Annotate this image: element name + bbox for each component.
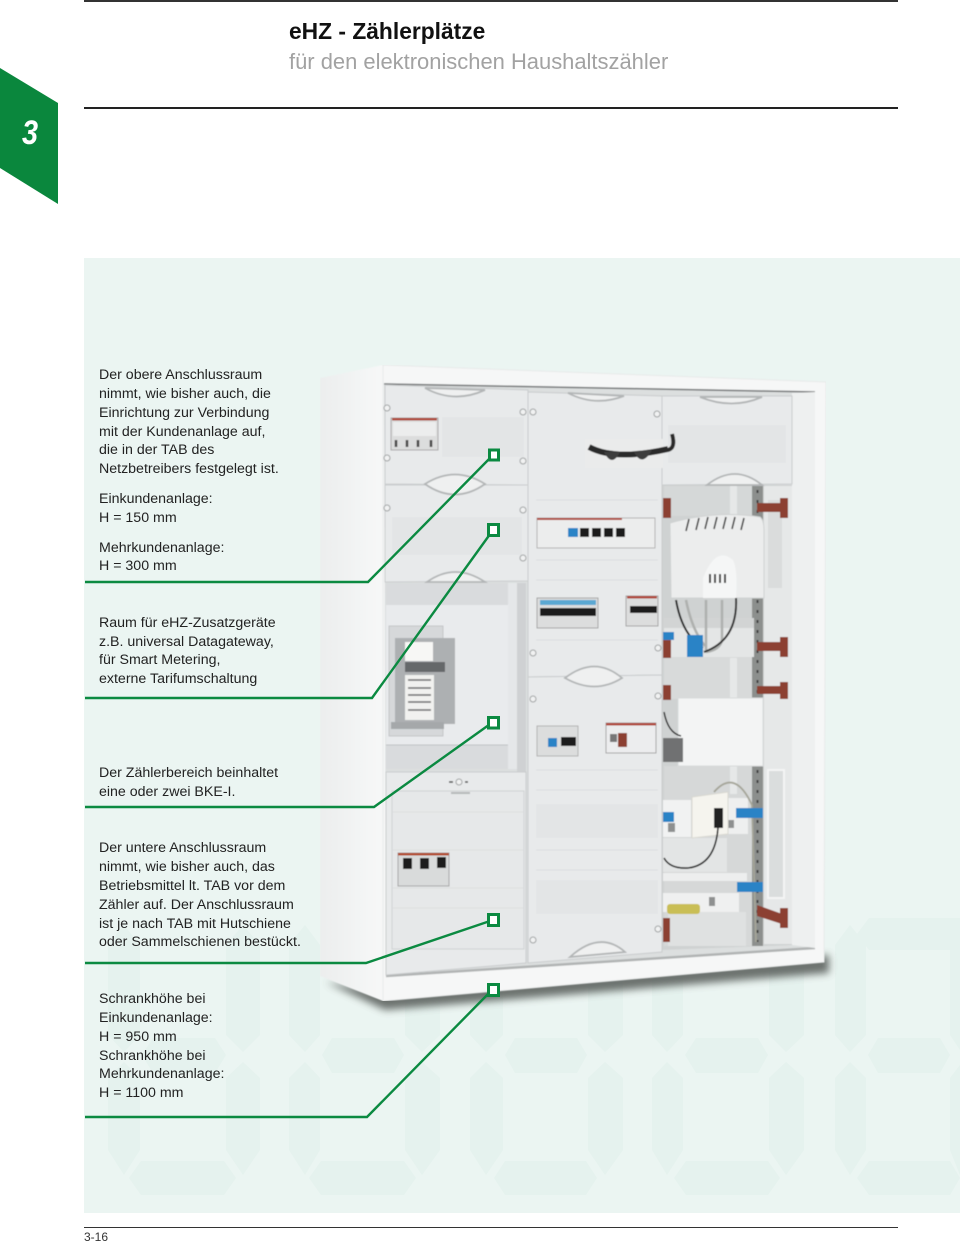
yellow terminal [667,904,700,914]
right light column [764,486,792,944]
handles [425,388,485,397]
cabinet interior [384,383,815,976]
callout text: upper connection room: nimmt, wie bisher auch, die [99,386,271,402]
callout text: upper connection room: die in der TAB des [99,442,214,458]
column 2 panels [528,392,792,963]
lower breaker [398,853,449,886]
callout text: meter area: eine oder zwei BKE-I. [99,784,235,800]
breaker row two [537,596,658,628]
leader line 2 [85,524,498,698]
callout text: cabinet height: H = 950 mm [99,1029,177,1045]
callout text: lower connection room: oder Sammelschienen bestückt. [99,934,301,950]
callout text: upper connection room: H = 300 mm [99,558,177,574]
handles [568,393,624,401]
latch [449,779,470,793]
callout text: auxiliary devices: Raum für eHZ-Zusatzgeräte [99,615,276,631]
callout text: meter area: Der Zählerbereich beinhaltet [99,765,278,781]
cabinet photo [320,365,826,1001]
callout text: lower connection room: Zähler auf. Der Anschlussraum [99,897,294,913]
breaker row three [537,723,656,756]
callout text: upper connection room: H = 150 mm [99,510,177,526]
surge arrester [391,418,438,450]
leader line 3 [85,718,498,807]
data gateway [663,515,764,657]
callout text: upper connection room: mit der Kundenanlage auf, [99,424,265,440]
vent lines [392,812,524,908]
top rule [84,0,898,2]
breaker row one [537,518,655,548]
mounting rail [752,486,763,946]
callout text: lower connection room: ist je nach TAB mit Hutschiene [99,916,291,932]
red brackets [663,498,788,942]
callout text: upper connection room: Der obere Anschlussraum [99,367,262,383]
chapter tab [0,68,58,204]
perforated strips [730,486,737,516]
callout text: lower connection room: Der untere Anschlussraum [99,840,266,856]
din rail middle [663,800,691,837]
wall socket with cable [664,783,756,942]
background digit pattern [108,918,960,1195]
callout text: upper connection room: Mehrkundenanlage: [99,540,224,556]
screws [384,405,390,411]
chapter tab: 3 [22,113,38,152]
column 1 panels [384,385,528,975]
right inner wall [792,392,815,948]
cabinet front frame [383,365,826,1001]
cable clamp [585,434,673,468]
callout text: upper connection room: Einrichtung zur Verbindung [99,405,269,421]
callout text: lower connection room: Betriebsmittel lt. TAB vor dem [99,878,285,894]
callout text: auxiliary devices: z.B. universal Datagateway, [99,634,274,650]
vent strips [442,417,524,457]
cabinet side wall [320,365,383,1001]
column 3 top panel [662,396,792,485]
callout text: auxiliary devices: externe Tarifumschaltung [99,671,257,687]
leader line 5 [85,984,498,1117]
meter [389,626,455,736]
callout text: upper connection room: Einkundenanlage: [99,491,213,507]
second device box [663,698,763,766]
din rail lower [663,873,747,881]
blue clamps [663,808,763,892]
panel: pale green background [84,258,960,1213]
din rail upper [664,618,754,628]
callout text: cabinet height: Schrankhöhe bei [99,991,205,1007]
cabinet shadow [326,955,829,1010]
callout text: upper connection room: Netzbetreibers festgelegt ist. [99,461,279,477]
callout text: lower connection room: nimmt, wie bisher auch, das [99,859,275,875]
screws [530,409,536,415]
meter recess [386,583,526,773]
footer rule [84,1227,898,1228]
leader line 1 [85,450,498,582]
title: eHZ - Zählerplätze [289,18,485,44]
lower panel [386,772,526,975]
callout text: auxiliary devices: für Smart Metering, [99,652,220,668]
callout text: cabinet height: Einkundenanlage: [99,1010,213,1026]
upper wall [664,486,752,516]
leader line 4 [85,914,498,963]
subtitle: für den elektronischen Haushaltszähler [289,49,668,74]
label sheet [663,838,727,872]
vent strips [536,804,658,838]
callout text: cabinet height: Schrankhöhe bei [99,1048,205,1064]
callout text: cabinet height: H = 1100 mm [99,1085,184,1101]
callout text: cabinet height: Mehrkundenanlage: [99,1066,224,1082]
device compartment [662,485,792,950]
header rule [84,107,898,109]
